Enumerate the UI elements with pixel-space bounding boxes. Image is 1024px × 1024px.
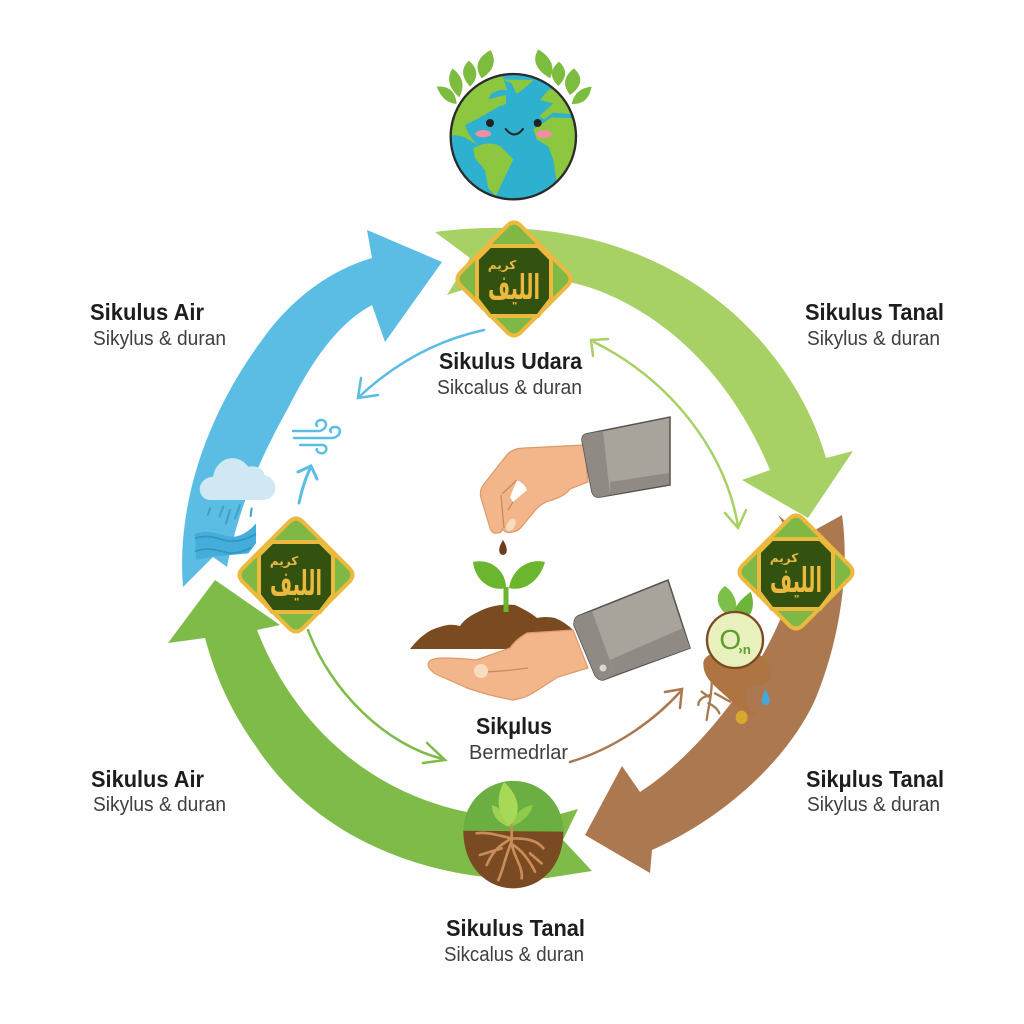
icon: top calligraphy diamond: الليف — [488, 268, 540, 308]
label: water cycle bottom left — [91, 766, 226, 816]
label: soil cycle bottom right: Sikμlus Tanal — [806, 766, 944, 792]
icon: smiling earth — [437, 49, 592, 199]
label: soil cycle top right: Sikulus Tanal — [805, 299, 944, 325]
arrow: light green soil cycle — [435, 228, 853, 518]
icon: soil nutrient badge with roots: O — [719, 624, 741, 655]
icon: top calligraphy diamond — [458, 222, 570, 336]
arrow: thin brown — [570, 689, 682, 762]
label: center cycle — [469, 713, 568, 764]
arrow: thin green lower — [308, 630, 445, 763]
icon: top calligraphy diamond: كريم — [488, 258, 516, 272]
label: air cycle center: Sikulus Udara — [439, 348, 582, 374]
label: soil cycle bottom right: Sikylus & duran — [807, 794, 940, 816]
label: water cycle top left — [90, 299, 226, 350]
icon: wind — [293, 420, 340, 453]
label: water cycle bottom left: Sikulus Air — [91, 766, 204, 792]
illustration: seedling — [473, 561, 545, 612]
icon: rain cloud and waves — [195, 458, 275, 560]
arrow: thin green double head — [591, 339, 746, 528]
label: soil cycle bottom right — [806, 766, 944, 816]
label: water cycle top left: Sikulus Air — [90, 299, 204, 325]
arrow: blue water cycle — [182, 230, 442, 587]
label: center cycle: Sikμlus — [476, 713, 552, 739]
icon: soil nutrient badge with roots — [698, 586, 772, 724]
label: water cycle top left: Sikylus & duran — [93, 328, 226, 350]
icon: right calligraphy diamond: الليف — [770, 561, 822, 601]
illustration: seed — [499, 540, 507, 555]
icon: left calligraphy diamond: كريم — [270, 554, 298, 568]
label: soil cycle bottom: Sikcalus & duran — [444, 944, 584, 966]
label: soil cycle bottom: Sikulus Tanal — [446, 915, 585, 941]
label: water cycle bottom left: Sikylus & duran — [93, 794, 226, 816]
label: air cycle center: Sikcalus & duran — [437, 377, 582, 399]
illustration: soil mound — [410, 605, 573, 649]
arrow: thin blue to wind — [358, 330, 484, 398]
icon: left calligraphy diamond: الليف — [270, 564, 322, 604]
label: soil cycle top right — [805, 299, 944, 350]
arrow: small blue up — [298, 466, 317, 503]
label: soil cycle bottom — [444, 915, 585, 966]
label: soil cycle top right: Sikylus & duran — [807, 328, 940, 350]
icon: right calligraphy diamond — [740, 516, 852, 628]
illustration: upper hand dropping seed — [480, 417, 670, 533]
arrow: brown soil cycle — [585, 515, 845, 873]
label: air cycle center — [437, 348, 582, 399]
label: center cycle: Bermedrlar — [469, 742, 568, 764]
arrow: green bottom cycle — [168, 580, 592, 879]
illustration: lower hand holding soil — [428, 580, 690, 700]
icon: soil and roots globe — [463, 781, 563, 888]
icon: soil nutrient badge with roots: ›n — [738, 642, 751, 657]
icon: right calligraphy diamond: كريم — [770, 551, 798, 565]
icon: left calligraphy diamond — [240, 518, 352, 632]
